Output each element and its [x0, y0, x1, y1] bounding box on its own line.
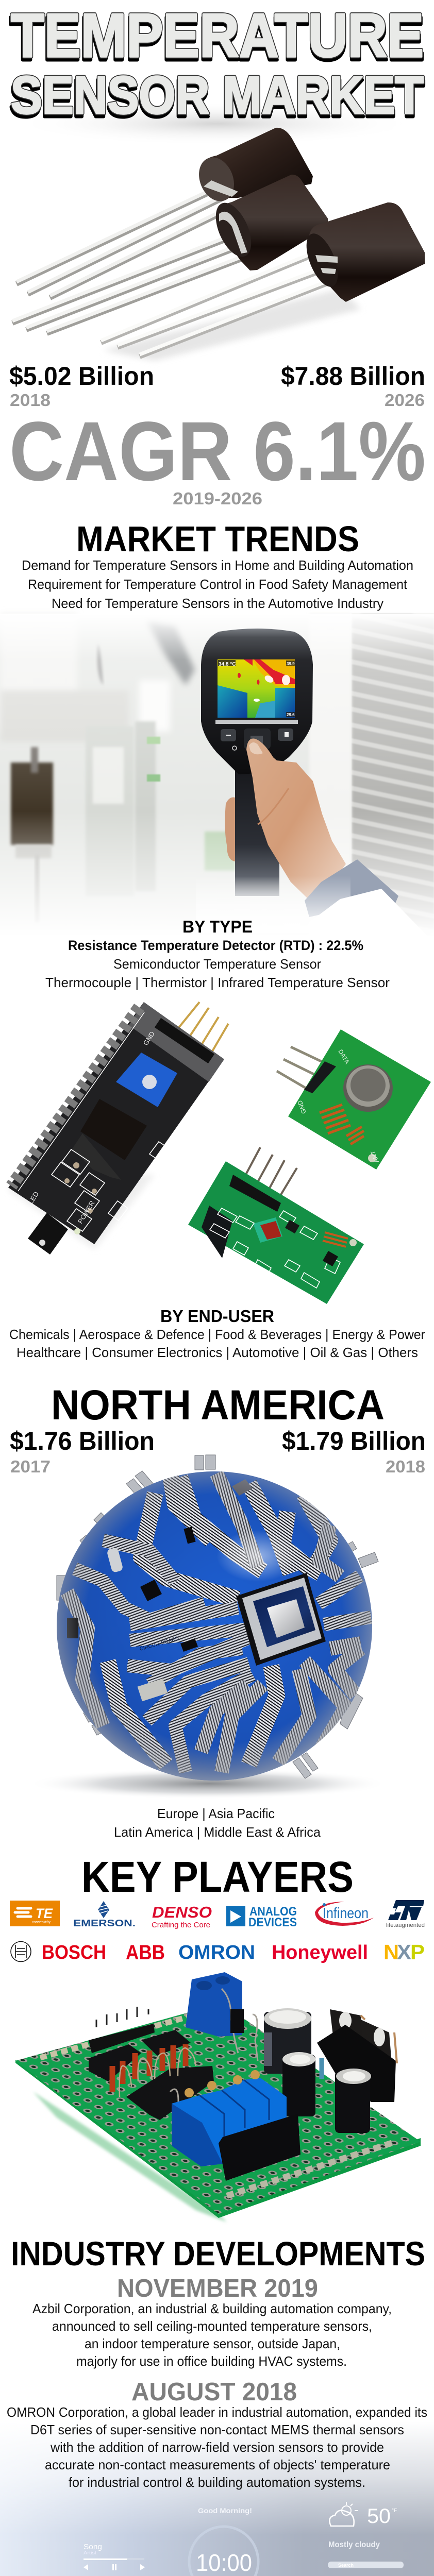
medium capacitor: [282, 2052, 315, 2116]
row of resistors: [112, 2044, 186, 2092]
board labels: GND: [142, 1030, 156, 1047]
music player: [84, 2543, 145, 2570]
logo: Emerson: [73, 1901, 136, 1928]
image: green RF receiver module: [188, 1147, 364, 1304]
stat: 2026 market value: [281, 362, 425, 410]
sensor 3 body: [300, 202, 425, 302]
blue trim pot: [116, 1053, 177, 1107]
development: august 2018: D6T series of super-sensitive non-contact MEMS thermal sensors: [30, 2422, 404, 2437]
development: november 2019: NOVEMBER 2019: [117, 2275, 318, 2302]
gold pins: [177, 1002, 228, 1055]
sensor 2 leads: [12, 236, 248, 333]
silver components on globe: [106, 1479, 253, 1701]
development: november 2019: [32, 2275, 392, 2369]
logo: Bosch: [11, 1941, 106, 1963]
module labels: DATA: [337, 1048, 351, 1065]
music player: Song: [84, 2543, 102, 2551]
ground shadow: [28, 1768, 389, 1799]
highlight: [216, 1530, 299, 1582]
wristwatch: [305, 859, 398, 917]
stat: north america 2017: $1.76 Billion: [10, 1427, 155, 1455]
blue trimmers: [172, 2070, 287, 2166]
stat: 2018 market value: [9, 362, 154, 410]
stat: 2026 market value: 2026: [385, 391, 425, 410]
weather widget: [328, 2502, 397, 2549]
hologram clock: [189, 2527, 258, 2576]
large electrolytic capacitor: [264, 2008, 311, 2074]
sleeve: [309, 889, 434, 943]
board underside: [15, 2060, 421, 2218]
copper coils: [320, 1105, 364, 1144]
board: [8, 1002, 224, 1244]
screen readouts: 39.9: [287, 662, 295, 666]
background fade: [0, 614, 434, 943]
pin header: [158, 1023, 211, 1059]
stat: 2026 market value: $7.88 Billion: [281, 362, 425, 391]
image: green RF transmitter module: [277, 1029, 431, 1170]
logo: TE Connectivity: TE: [36, 1906, 53, 1921]
top fade: [0, 2421, 434, 2535]
coil: [323, 1232, 348, 1247]
jumper: [28, 1213, 68, 1255]
type segments: Resistance Temperature Detector (RTD) : 22.5%: [68, 938, 363, 953]
surface mounted parts: [52, 1142, 165, 1231]
stat: 2018 market value: 2018: [10, 391, 51, 410]
board labels: LED: [27, 1190, 40, 1206]
hologram clock: 10:00: [196, 2549, 252, 2576]
sensor 2 body: [209, 175, 328, 270]
image: three transistor-style temperature sensors: [12, 128, 425, 361]
small IC: [72, 1133, 121, 1180]
board face: [15, 2003, 421, 2214]
sensor 1 leads: [16, 188, 222, 298]
edge shading: [57, 1471, 372, 1781]
wall: [0, 2421, 434, 2576]
pin row edge: [11, 1007, 139, 1186]
stat: north america 2018: 2018: [386, 1457, 425, 1476]
logo: NXP: [383, 1940, 425, 1964]
image: thermal camera scene: [0, 614, 434, 943]
development: november 2019: Azbil Corporation, an industrial & building automation company,: [32, 2301, 392, 2316]
logo: STMicroelectronics: life.augmented: [386, 1922, 425, 1928]
board labels: [27, 1030, 156, 1225]
logo: NXP: P: [410, 1940, 425, 1964]
metal can: [343, 1064, 393, 1112]
logo: NXP: N: [383, 1940, 399, 1964]
other regions: Europe | Asia Pacific: [157, 1806, 275, 1821]
black header: [304, 1061, 336, 1093]
type segments: Semiconductor Temperature Sensor: [113, 956, 321, 972]
heading: north america: NORTH AMERICA: [51, 1382, 385, 1429]
stat: north america 2018: $1.79 Billion: [282, 1427, 426, 1455]
sphere: [57, 1471, 372, 1781]
silkscreen parts: [210, 1208, 340, 1288]
leads soft shadow: [103, 289, 361, 361]
end-user segments: [9, 1327, 425, 1360]
small resistor: [320, 2058, 324, 2079]
silver bar: [215, 720, 298, 724]
logo: Denso: Crafting the Core: [152, 1921, 210, 1929]
logo: NXP: X: [397, 1940, 411, 1964]
heading: key players: KEY PLAYERS: [81, 1853, 354, 1901]
logo: Honeywell: Honeywell: [272, 1942, 368, 1963]
capacitors around globe: [57, 1455, 378, 1778]
hand holding the camera: [225, 738, 346, 901]
end-user segments: Chemicals | Aerospace & Defence | Food & Beverages | Energy & Power: [9, 1327, 425, 1342]
search bar: Search: [338, 2563, 354, 2568]
search bar: [328, 2562, 404, 2568]
screen readouts: 34.8 °C: [219, 662, 236, 667]
logo: Omron: OMRON: [178, 1942, 255, 1963]
small chips on globe: [67, 1527, 198, 1652]
logo: Infineon: Infineon: [323, 1905, 369, 1922]
pin header: [89, 2007, 155, 2053]
stat: north america 2018: [282, 1427, 426, 1476]
black socket strip: [219, 2114, 301, 2181]
wire links: [170, 1989, 258, 2112]
lower fade: [196, 876, 350, 933]
trace bands: [67, 1473, 371, 1772]
logo: TE Connectivity: [10, 1901, 60, 1926]
logo: Denso: DENSO: [152, 1903, 212, 1921]
development: august 2018: accurate non-contact measurements of objects' temperature: [45, 2457, 390, 2472]
logo: Infineon: [315, 1902, 374, 1926]
weather widget: °F: [392, 2508, 397, 2514]
logo: ABB: ABB: [126, 1941, 165, 1964]
image: LCD adapter circuit board: [8, 1002, 228, 1255]
heading: by end-user: BY END-USER: [160, 1307, 274, 1326]
module labels: [296, 1048, 380, 1164]
stat: CAGR: 2019-2026: [173, 489, 262, 508]
module labels: ANT: [369, 1149, 380, 1164]
development: november 2019: an indoor temperature sensor, outside Japan,: [85, 2336, 340, 2351]
weather widget: Mostly cloudy: [328, 2540, 380, 2549]
IC: [202, 1206, 232, 1258]
right capacitor: [335, 2069, 371, 2133]
blue terminal block: [186, 1972, 242, 2037]
integrated circuits: [89, 2030, 214, 2120]
image: circuit board globe: [57, 1455, 379, 1796]
development: november 2019: announced to sell ceiling-mounted temperature sensors,: [52, 2318, 372, 2334]
development: august 2018: with the addition of narrow-field version sensors to provide: [50, 2439, 384, 2455]
development: august 2018: [7, 2378, 427, 2490]
logo: Analog Devices: DEVICES: [248, 1916, 297, 1929]
main IC: [80, 1099, 147, 1160]
central processor chip: [236, 1573, 326, 1666]
logo: Analog Devices: ANALOG: [249, 1905, 297, 1919]
end-user segments: Healthcare | Consumer Electronics | Automotive | Oil & Gas | Others: [16, 1345, 418, 1360]
stat: 2018 market value: $5.02 Billion: [9, 362, 154, 391]
pad: [368, 1154, 376, 1162]
soft shadow: [8, 1175, 155, 1249]
logo: Analog Devices: [226, 1905, 297, 1929]
type segments: [45, 938, 390, 990]
logo: Bosch: BOSCH: [42, 1942, 106, 1963]
circuit board label: CIRCUIT BOARD: [139, 1636, 179, 1652]
development: august 2018: for industrial control & building automation systems.: [69, 2475, 365, 2490]
camera buttons: [221, 728, 293, 750]
other regions: Latin America | Middle East & Africa: [114, 1824, 321, 1840]
other regions: [114, 1806, 321, 1840]
image: smart home living room: [0, 2421, 434, 2576]
small black part: [323, 1251, 338, 1266]
voltage regulators: [317, 2009, 397, 2102]
black header: [229, 1175, 281, 1212]
heading: by type: BY TYPE: [182, 917, 253, 936]
blurred background: [0, 614, 434, 940]
trend list: Requirement for Temperature Control in Food Safety Management: [28, 577, 408, 592]
key player logos: [10, 1900, 425, 1964]
tuned red component: [253, 1217, 282, 1243]
screen readouts: [218, 660, 295, 717]
solder pads along edges: [40, 2012, 206, 2058]
logo: Emerson: EMERSON.: [73, 1918, 136, 1928]
trend list: Demand for Temperature Sensors in Home and Building Automation: [22, 557, 413, 573]
stat: north america 2017: 2017: [10, 1457, 51, 1476]
logo: TE Connectivity: connectivity: [32, 1921, 51, 1924]
logo: Denso: [152, 1903, 212, 1929]
thermal camera head: [201, 629, 313, 774]
thermal screen: [218, 659, 295, 718]
module labels: GND: [296, 1099, 308, 1115]
greeting: Good Morning!: [198, 2506, 252, 2515]
pale reflection: [33, 2092, 227, 2222]
trend list: Need for Temperature Sensors in the Automotive Industry: [52, 596, 383, 611]
title soft shadow: [15, 102, 418, 145]
trend list: [22, 557, 413, 611]
type segments: Thermocouple | Thermistor | Infrared Temperature Sensor: [45, 975, 390, 990]
title: [10, 1, 424, 145]
thermal camera handle: [235, 768, 279, 896]
music player: Artist: [84, 2550, 97, 2555]
board labels: POWER: [76, 1199, 96, 1225]
sensor 3 leads: [101, 252, 335, 357]
sensor 1 body: [193, 128, 313, 207]
screen readouts: 29.6: [287, 713, 295, 717]
stat: north america 2017: [10, 1427, 155, 1476]
weather widget: 50: [367, 2505, 391, 2528]
image: green prototype circuit board: [15, 1972, 421, 2222]
development: august 2018: AUGUST 2018: [131, 2378, 297, 2406]
heading: market trends: MARKET TRENDS: [76, 519, 359, 559]
development: november 2019: majorly for use in office building HVAC systems.: [76, 2353, 347, 2369]
logo: STMicroelectronics: [386, 1900, 425, 1928]
